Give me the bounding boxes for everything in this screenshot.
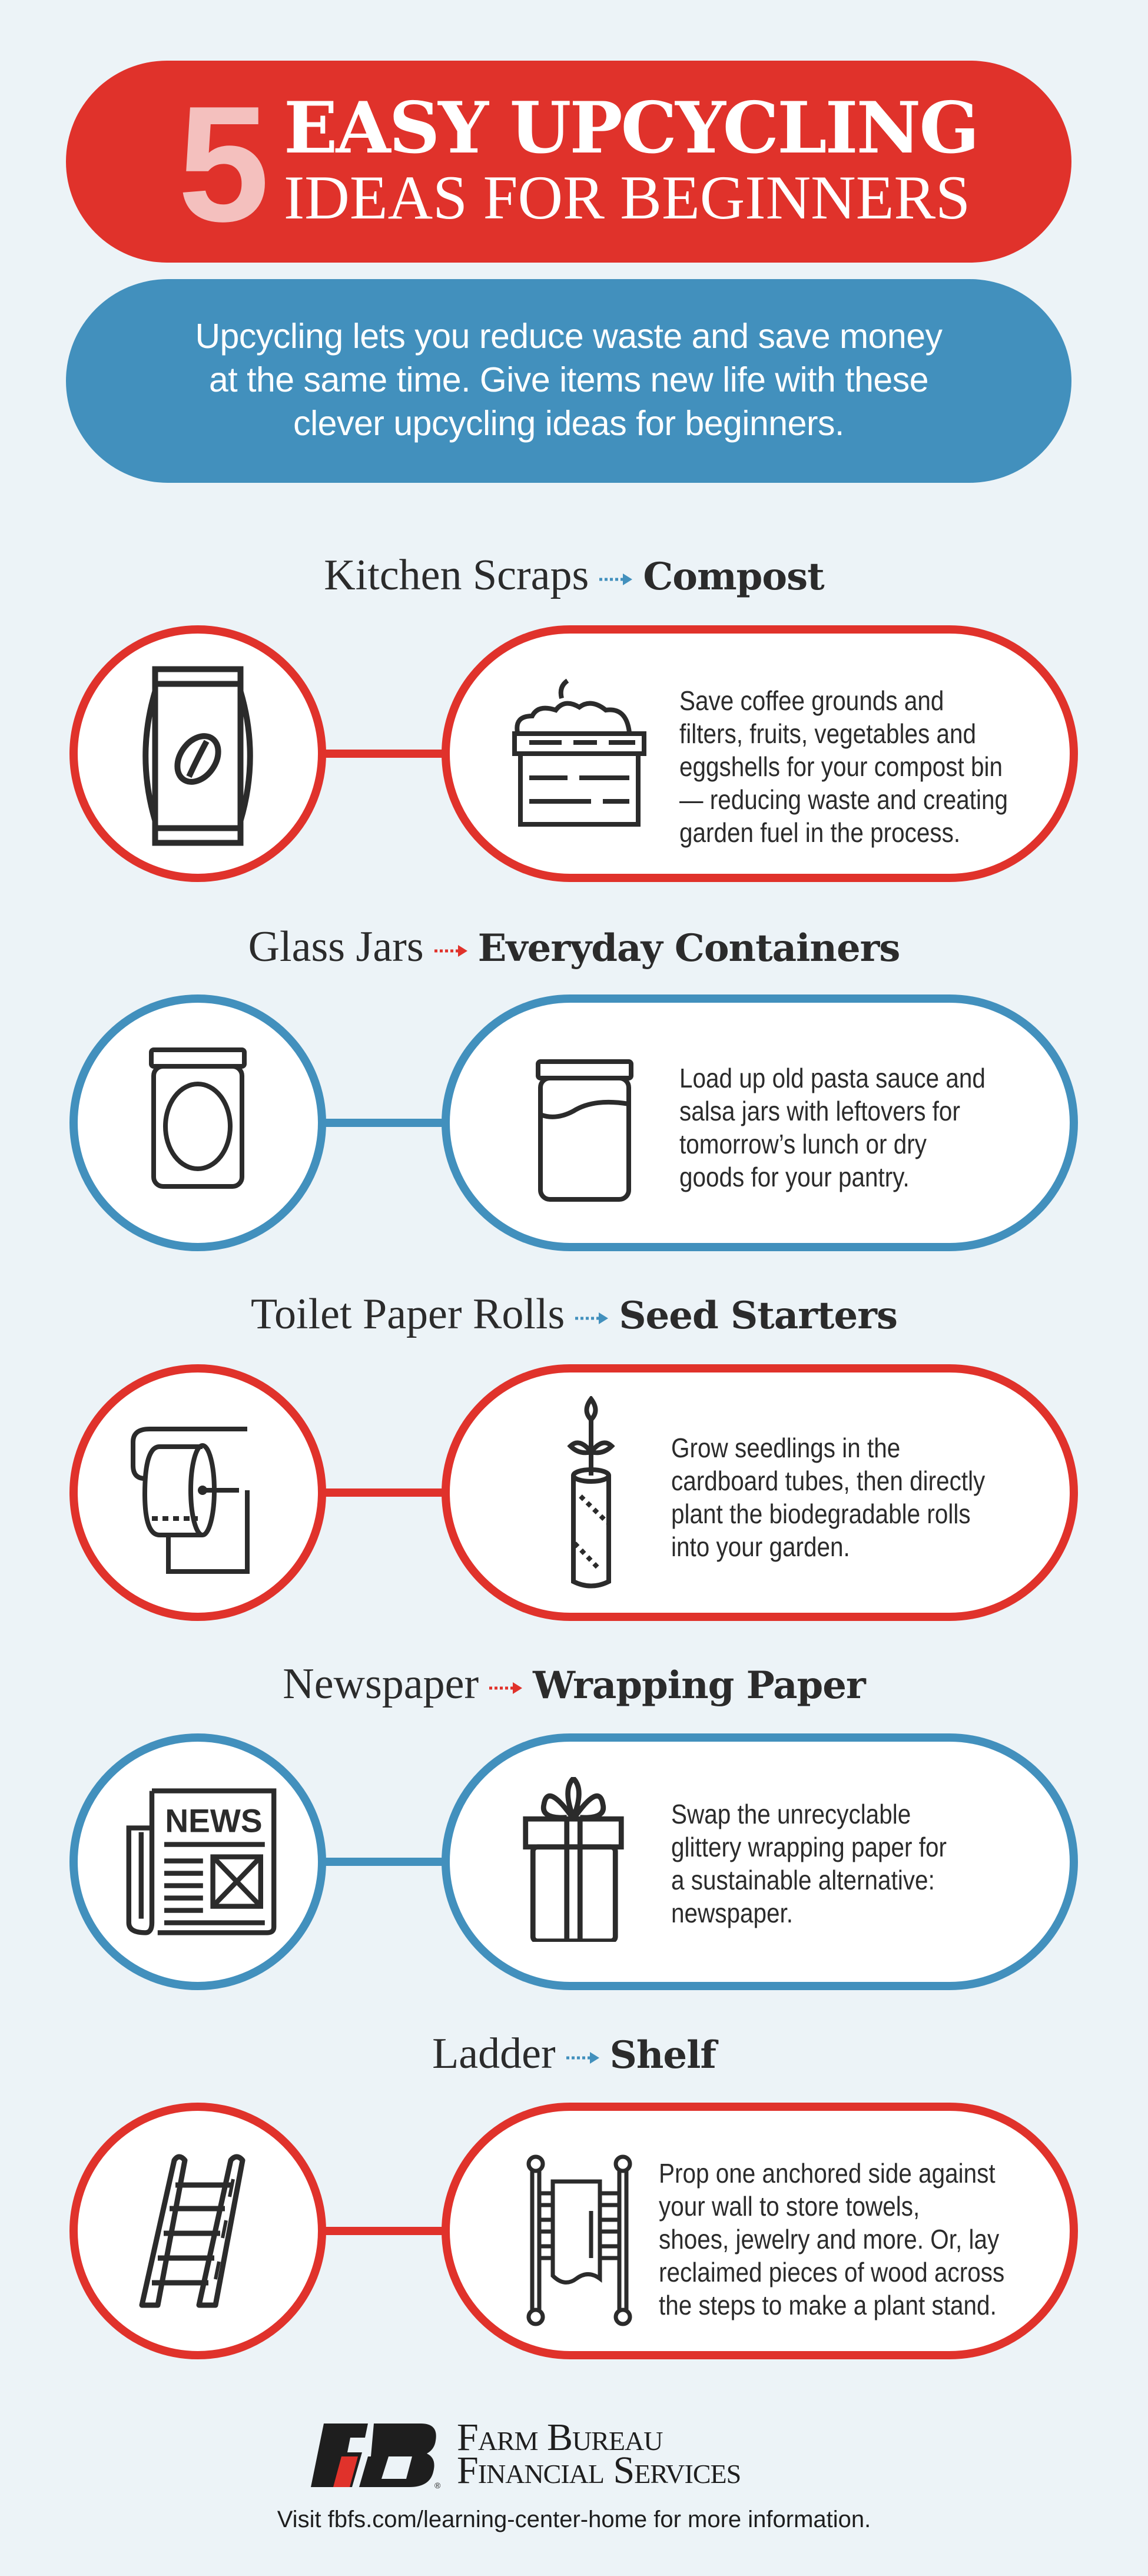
text xyxy=(679,685,1008,848)
row 2 xyxy=(69,994,1078,1251)
intro panel: clever upcycling ideas for beginners. xyxy=(293,404,844,443)
text: garden fuel in the process. xyxy=(679,817,960,848)
logo mark: ® xyxy=(434,2481,441,2490)
pill: shelf xyxy=(442,2103,1078,2359)
text: filters, fruits, vegetables and xyxy=(679,718,976,749)
heading: glass jars: Glass Jars Everyday Containers xyxy=(248,923,900,971)
logo text: Farm Bureau xyxy=(457,2416,662,2459)
heading: toilet paper rolls: Toilet Paper Rolls Seed Starters xyxy=(251,1290,897,1338)
text: eggshells for your compost bin xyxy=(679,751,1003,782)
icon circle: ladder xyxy=(69,2103,326,2359)
text: Grow seedlings in the xyxy=(671,1433,900,1463)
text xyxy=(679,1063,986,1192)
text: Load up old pasta sauce and xyxy=(679,1063,986,1093)
heading: ladder: Ladder Shelf xyxy=(432,2030,716,2078)
big number 5: 5 xyxy=(178,72,270,256)
logo text xyxy=(457,2416,741,2492)
title line 2: IDEAS FOR BEGINNERS xyxy=(284,163,970,232)
text: your wall to store towels, xyxy=(659,2191,920,2222)
intro panel: Upcycling lets you reduce waste and save money xyxy=(195,317,943,356)
text: the steps to make a plant stand. xyxy=(659,2290,997,2320)
text: Swap the unrecyclable xyxy=(671,1799,911,1829)
text: salsa jars with leftovers for xyxy=(679,1096,960,1126)
pill: containers xyxy=(442,994,1078,1251)
text xyxy=(671,1433,986,1562)
icon circle: coffee bag xyxy=(69,625,326,882)
text: newspaper. xyxy=(671,1898,793,1928)
text: Prop one anchored side against xyxy=(659,2158,996,2189)
text xyxy=(659,2158,1004,2320)
icon circle: newspaper xyxy=(69,1733,326,1990)
pill: wrapping paper xyxy=(442,1733,1078,1990)
text: goods for your pantry. xyxy=(679,1162,910,1192)
pill: compost xyxy=(442,625,1078,882)
text: glittery wrapping paper for xyxy=(671,1832,947,1862)
row 1 xyxy=(69,625,1078,882)
logo text: Financial Services xyxy=(457,2449,741,2492)
icon: filled jar xyxy=(536,1059,633,1202)
row 5 xyxy=(69,2103,1078,2359)
text xyxy=(671,1799,947,1928)
text: shoes, jewelry and more. Or, lay xyxy=(659,2224,999,2255)
intro panel xyxy=(66,279,1071,483)
text: a sustainable alternative: xyxy=(671,1865,935,1895)
text: cardboard tubes, then directly xyxy=(671,1466,985,1496)
intro panel: at the same time. Give items new life with these xyxy=(209,360,928,399)
icon: seedling tube xyxy=(567,1396,615,1589)
text: Save coffee grounds and xyxy=(679,685,944,716)
heading: kitchen scraps: Kitchen Scraps Compost xyxy=(324,551,824,599)
icon: compost bin xyxy=(512,678,646,827)
logo xyxy=(311,2416,741,2492)
icon circle: toilet paper xyxy=(69,1364,326,1621)
pill: seed starters xyxy=(442,1364,1078,1621)
title line 1: EASY UPCYCLING xyxy=(284,87,978,170)
heading: newspaper: Newspaper Wrapping Paper xyxy=(283,1660,865,1708)
icon circle: jar xyxy=(69,994,326,1251)
text: plant the biodegradable rolls xyxy=(671,1498,971,1529)
footer url: Visit fbfs.com/learning-center-home for more information. xyxy=(277,2507,871,2532)
text: tomorrow’s lunch or dry xyxy=(679,1129,927,1159)
text: into your garden. xyxy=(671,1531,850,1562)
title banner xyxy=(66,61,1071,263)
text: reclaimed pieces of wood across xyxy=(659,2257,1004,2287)
logo mark xyxy=(311,2424,441,2490)
icon circle: newspaper: NEWS xyxy=(165,1802,263,1839)
text: — reducing waste and creating xyxy=(679,784,1008,815)
icon: gift xyxy=(523,1777,624,1942)
row 3 xyxy=(69,1364,1078,1621)
icon: towel shelf xyxy=(526,2155,632,2326)
row 4 xyxy=(69,1733,1078,1990)
